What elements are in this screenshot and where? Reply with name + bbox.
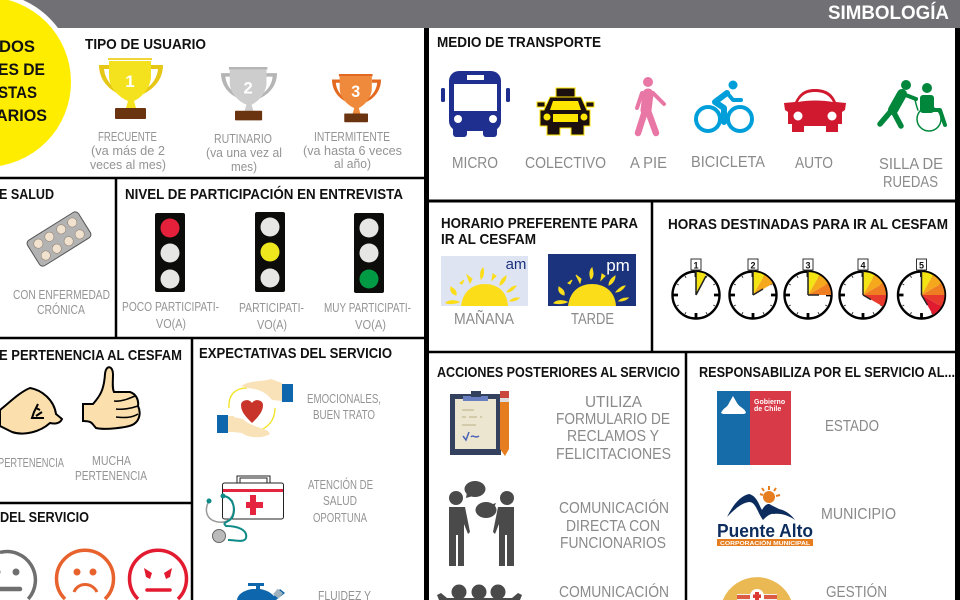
panel: salud bbox=[0, 178, 116, 338]
label: municipio: MUNICIPIO bbox=[821, 506, 896, 523]
chart: clock 1 hour: 1 bbox=[693, 260, 699, 270]
chart: clock 2 hours: 2 bbox=[750, 260, 756, 270]
label: frecuente: (va más de 2 bbox=[91, 143, 165, 158]
label: intermitente: INTERMITENTE bbox=[314, 129, 390, 144]
label: emocionales: EMOCIONALES, bbox=[307, 391, 381, 406]
icon: pill blister bbox=[26, 210, 92, 268]
chart: clock 3 hours bbox=[784, 259, 832, 319]
heading: nivel de participación: NIVEL DE PARTICIPACIÓN EN ENTREVISTA bbox=[125, 185, 403, 203]
icon: afternoon sun: pm bbox=[606, 256, 630, 275]
chart: clock 2 hours bbox=[729, 259, 777, 319]
label: a pie: A PIE bbox=[630, 155, 667, 172]
heading: medio de transporte: MEDIO DE TRANSPORTE bbox=[437, 34, 601, 51]
heading: pertenencia: E PERTENENCIA AL CESFAM bbox=[0, 347, 182, 364]
header title: SIMBOLOGÍA bbox=[828, 2, 949, 24]
logo: puente alto: Puente Alto bbox=[717, 521, 813, 541]
label: comunicación directa: COMUNICACIÓN bbox=[559, 498, 669, 517]
logo: puente alto bbox=[717, 486, 813, 547]
label: con enfermedad crónica: CON ENFERMEDAD bbox=[13, 287, 110, 302]
label: rutinario: mes) bbox=[231, 159, 257, 174]
callout: yellow circle: DOS bbox=[0, 37, 35, 56]
logo: puente alto: CORPORACIÓN MUNICIPAL bbox=[720, 539, 810, 547]
label: atención de salud oportuna: OPORTUNA bbox=[313, 510, 367, 525]
label: utiliza formulario: RECLAMOS Y bbox=[567, 428, 659, 445]
icon: silver trophy bbox=[221, 67, 277, 120]
label: auto: AUTO bbox=[795, 155, 833, 172]
icon: clipboard and pencil bbox=[450, 391, 509, 456]
icon: pedestrian bbox=[637, 77, 664, 133]
heading: horario preferente: HORARIO PREFERENTE PARA bbox=[441, 215, 638, 232]
icon: morning sun: am bbox=[506, 256, 526, 273]
label: silla de ruedas: SILLA DE bbox=[879, 156, 943, 173]
label: rutinario: RUTINARIO bbox=[214, 131, 272, 146]
heading: horario preferente: IR AL CESFAM bbox=[441, 231, 536, 248]
icon: car bbox=[784, 89, 846, 132]
label: poco participativo bbox=[122, 299, 219, 331]
label: atención de salud oportuna: ATENCIÓN DE bbox=[308, 477, 373, 492]
panel: horario preferente bbox=[429, 200, 652, 352]
icon: green traffic light bbox=[354, 213, 384, 293]
label: con enfermedad crónica bbox=[13, 287, 110, 317]
icon: angry face bbox=[130, 550, 186, 599]
icon: afternoon sun bbox=[548, 254, 636, 306]
label: frecuente: veces al mes) bbox=[90, 157, 166, 172]
label: mucha pertenencia bbox=[75, 453, 147, 483]
heading: del servicio: DEL SERVICIO bbox=[0, 509, 89, 526]
heading: tipo de usuario: TIPO DE USUARIO bbox=[85, 36, 206, 53]
icon: blue machine bbox=[237, 583, 285, 600]
panel: pertenencia al cesfam bbox=[0, 338, 192, 503]
panel: del servicio bbox=[0, 503, 192, 600]
heading: acciones posteriores: ACCIONES POSTERIORES AL SERVICIO bbox=[437, 364, 680, 381]
icon: two people talking bbox=[448, 481, 515, 566]
label: tarde: TARDE bbox=[571, 311, 614, 328]
chart: clock 1 hour bbox=[672, 259, 720, 319]
icon: sad face bbox=[56, 550, 114, 599]
panel: medio de transporte bbox=[429, 28, 955, 200]
label: micro: MICRO bbox=[452, 155, 498, 172]
label: silla de ruedas: RUEDAS bbox=[883, 174, 938, 191]
label: participativo: VO(A) bbox=[257, 317, 287, 332]
label: emocionales bbox=[307, 391, 381, 422]
icon: morning sun bbox=[441, 256, 528, 306]
label: frecuente: FRECUENTE bbox=[98, 129, 157, 144]
label: participativo: PARTICIPATI- bbox=[239, 300, 304, 315]
icon: taxi bbox=[537, 88, 594, 135]
label: atención de salud oportuna: SALUD bbox=[323, 493, 357, 508]
label: intermitente: al año) bbox=[334, 156, 371, 171]
icon: first aid kit and stethoscope bbox=[206, 476, 284, 542]
callout: yellow circle bbox=[0, 0, 76, 172]
label: bicicleta: BICICLETA bbox=[691, 154, 765, 171]
panel: horas destinadas bbox=[652, 200, 955, 352]
label: utiliza formulario: UTILIZA bbox=[585, 394, 642, 411]
label: comunicación directa: FUNCIONARIOS bbox=[560, 535, 666, 552]
label: muy participativo: VO(A) bbox=[355, 317, 386, 332]
label: intermitente: (va hasta 6 veces bbox=[303, 143, 402, 158]
icon: bus bbox=[441, 71, 510, 137]
label: utiliza formulario: FORMULARIO DE bbox=[556, 411, 670, 428]
chart: clock 3 hours: 3 bbox=[805, 260, 811, 270]
label: colectivo: COLECTIVO bbox=[525, 155, 606, 172]
panel: tipo de usuario bbox=[0, 28, 425, 178]
panel: expectativas del servicio bbox=[192, 338, 425, 600]
icon: red traffic light bbox=[155, 213, 185, 292]
icon: closed fist bbox=[0, 388, 62, 434]
label: silla de ruedas bbox=[879, 156, 943, 191]
chart: clock 5 hours: 5 bbox=[919, 260, 924, 270]
label: rutinario bbox=[206, 131, 282, 174]
label: rutinario: (va una vez al bbox=[206, 145, 282, 160]
label: comunicación directa: DIRECTA CON bbox=[566, 518, 660, 535]
label: estado: ESTADO bbox=[825, 418, 879, 435]
icon: yellow traffic light bbox=[255, 212, 285, 292]
label: intermitente bbox=[303, 129, 402, 171]
icon: hands holding heart bbox=[217, 379, 293, 437]
icon: bronze trophy: 3 bbox=[351, 83, 360, 101]
label: con enfermedad crónica: CRÓNICA bbox=[37, 302, 85, 317]
icon: person pushing wheelchair bbox=[880, 80, 945, 131]
icon: internal management bbox=[723, 577, 791, 600]
label: mucha pertenencia: PERTENENCIA bbox=[75, 468, 147, 483]
logo: gobierno de chile bbox=[717, 391, 791, 465]
logo: gobierno de chile: Gobierno bbox=[754, 399, 785, 406]
label: comunicación directa bbox=[559, 498, 669, 552]
icon: crowd bbox=[437, 584, 522, 600]
label: frecuente bbox=[90, 129, 166, 172]
heading: expectativas: EXPECTATIVAS DEL SERVICIO bbox=[199, 345, 392, 362]
chart: clock 4 hours bbox=[839, 259, 887, 319]
panel: acciones posteriores bbox=[429, 352, 686, 600]
logo: gobierno de chile: de Chile bbox=[754, 406, 781, 413]
icon: bronze trophy bbox=[332, 74, 381, 122]
icon: bicycle bbox=[696, 80, 752, 131]
label: mañana: MAÑANA bbox=[454, 308, 514, 328]
icon: neutral face bbox=[0, 552, 35, 599]
label: poco participativo: VO(A) bbox=[156, 316, 186, 331]
heading: horario preferente bbox=[441, 215, 638, 248]
chart: clock 5 hours bbox=[898, 259, 946, 319]
label: muy participativo: MUY PARTICIPATI- bbox=[324, 300, 411, 315]
label: mucha pertenencia: MUCHA bbox=[92, 453, 131, 468]
label: participativo bbox=[239, 300, 304, 332]
header bar bbox=[0, 0, 960, 28]
panel: nivel de participación bbox=[116, 178, 425, 338]
label: poco participativo: POCO PARTICIPATI- bbox=[122, 299, 219, 314]
icon: thumbs up bbox=[83, 367, 140, 429]
icon: gold trophy: 1 bbox=[125, 72, 135, 91]
label: utiliza formulario bbox=[556, 394, 671, 463]
heading: salud: E SALUD bbox=[0, 186, 54, 203]
chart: clock 4 hours: 4 bbox=[860, 260, 866, 270]
label: atención de salud oportuna bbox=[308, 477, 373, 525]
label: muy participativo bbox=[324, 300, 411, 332]
label: pertenencia: PERTENENCIA bbox=[0, 455, 64, 470]
label: emocionales: BUEN TRATO bbox=[313, 407, 375, 422]
icon: silver trophy: 2 bbox=[244, 78, 253, 97]
icon: gold trophy bbox=[99, 58, 163, 119]
label: utiliza formulario: FELICITACIONES bbox=[556, 446, 671, 463]
panel: responsabiliza bbox=[686, 352, 955, 600]
